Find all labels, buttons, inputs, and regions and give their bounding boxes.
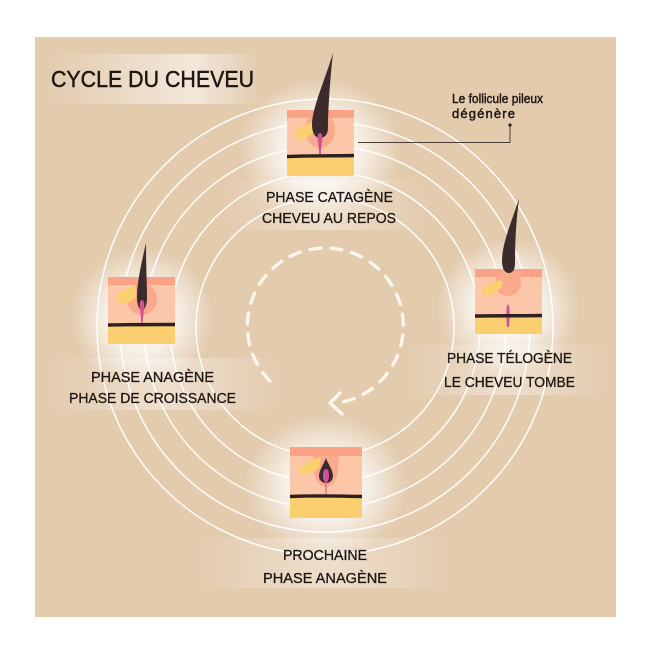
callout: follicle degenerates	[358, 91, 543, 142]
label: anagen	[45, 358, 285, 410]
stage: anagen	[45, 243, 285, 410]
callout: follicle degenerates: Le follicule pileux	[452, 91, 543, 106]
concentric cycle rings	[97, 99, 553, 555]
glow: top stage	[238, 78, 402, 222]
label: anagen: PHASE ANAGÈNE	[91, 369, 214, 386]
label: catagen	[225, 180, 425, 230]
label: catagen: CHEVEU AU REPOS	[262, 211, 396, 227]
background panel	[35, 37, 616, 617]
title	[45, 54, 260, 104]
label: catagen: PHASE CATAGÈNE	[266, 189, 393, 206]
stage: catagen	[225, 53, 425, 230]
label: next anagen: PROCHAINE	[283, 548, 367, 564]
stage: next anagen	[195, 447, 455, 588]
icon: early anagen follicle	[290, 447, 362, 518]
label: telogen	[405, 345, 610, 395]
arrow: dashed cycle direction	[247, 248, 403, 414]
label: telogen: PHASE TÉLOGÈNE	[447, 350, 572, 367]
label: next anagen	[195, 538, 455, 588]
stage: telogen	[405, 199, 610, 395]
glow: right stage	[436, 238, 580, 378]
icon: catagen follicle	[287, 53, 354, 176]
callout: follicle degenerates: dégénère	[452, 106, 515, 121]
title: CYCLE DU CHEVEU	[51, 66, 254, 92]
glow: left stage	[70, 248, 214, 388]
glow: bottom stage	[244, 414, 408, 558]
label: next anagen: PHASE ANAGÈNE	[263, 570, 387, 587]
label: anagen: PHASE DE CROISSANCE	[69, 391, 236, 407]
icon: anagen follicle	[108, 243, 175, 344]
icon: telogen follicle	[475, 199, 542, 334]
label: telogen: LE CHEVEU TOMBE	[444, 375, 575, 391]
